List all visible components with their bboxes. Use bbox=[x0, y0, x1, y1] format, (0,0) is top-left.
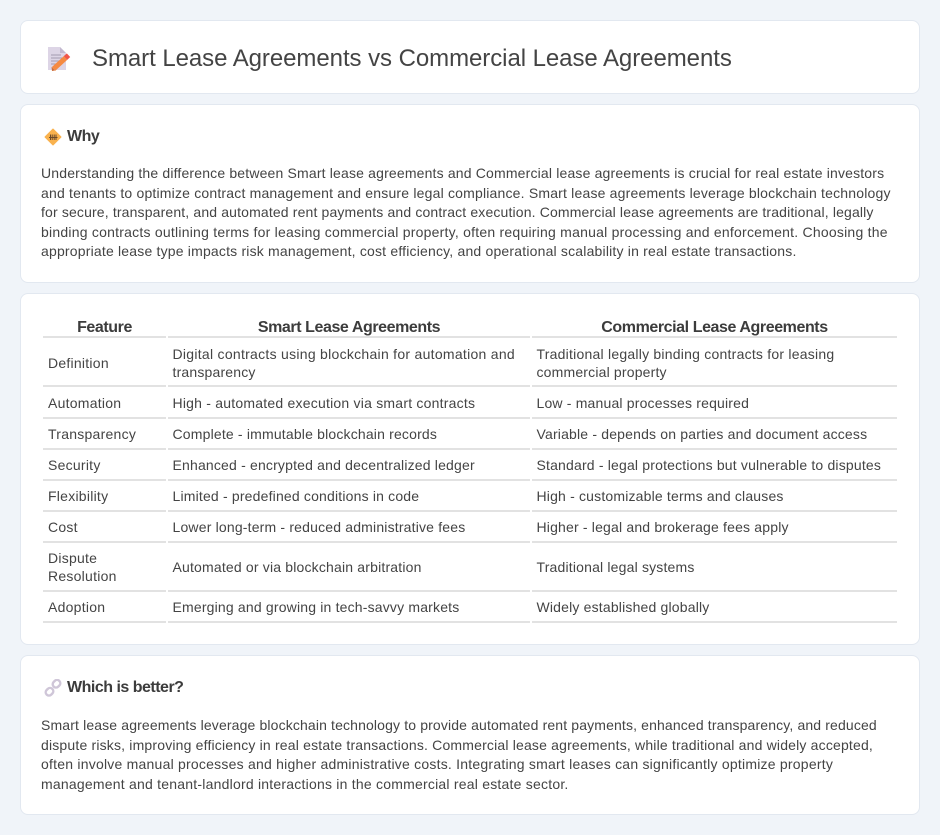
comparison table: Flexibility bbox=[48, 488, 108, 504]
heading: which is better: Which is better? bbox=[67, 679, 183, 696]
icon: chain link bbox=[44, 679, 62, 697]
text block: why explanation: Understanding the difference between Smart lease agreements and Commercial lease agreements is crucial for real estate investors bbox=[41, 165, 884, 181]
heading: why: Why bbox=[67, 128, 99, 145]
comparison table: Higher - legal and brokerage fees apply bbox=[536, 519, 789, 535]
comparison table: Complete - immutable blockchain records bbox=[172, 426, 437, 442]
comparison table: Digital contracts using blockchain for automation and bbox=[172, 346, 515, 362]
comparison table: Cost bbox=[48, 519, 78, 535]
comparison table: Traditional legally binding contracts for leasing bbox=[536, 346, 834, 362]
comparison table: commercial property bbox=[536, 364, 667, 380]
comparison table: Resolution bbox=[48, 568, 117, 584]
comparison table: Lower long-term - reduced administrative fees bbox=[172, 519, 465, 535]
text block: why explanation bbox=[41, 165, 891, 259]
comparison table: High - automated execution via smart contracts bbox=[172, 394, 475, 410]
comparison table: Limited - predefined conditions in code bbox=[172, 488, 419, 504]
text block: verdict bbox=[41, 717, 877, 792]
panel: which is better bbox=[20, 655, 920, 815]
comparison table: Definition bbox=[48, 354, 109, 370]
comparison table: Automated or via blockchain arbitration bbox=[172, 559, 422, 575]
comparison table: Low - manual processes required bbox=[536, 394, 749, 410]
comparison table: Dispute bbox=[48, 550, 97, 566]
text block: verdict: management and tenant-landlord interactions in the commercial real estate sector. bbox=[41, 776, 569, 792]
comparison table: Traditional legal systems bbox=[536, 559, 695, 575]
title: Smart Lease Agreements vs Commercial Lease Agreements bbox=[92, 45, 732, 72]
comparison table: Standard - legal protections but vulnerable to disputes bbox=[536, 457, 881, 473]
text block: why explanation: binding contracts outlining terms for leasing commercial property, often requiring manual processing and enforcement. Choosing the bbox=[41, 224, 888, 240]
text block: why explanation: appropriate lease type impacts risk management, cost efficiency, and operational scalability in real estate transactions. bbox=[41, 243, 797, 259]
icon: document with pencil bbox=[48, 47, 70, 71]
comparison table: Feature bbox=[77, 319, 132, 336]
comparison table: Widely established globally bbox=[536, 599, 709, 615]
comparison table: Security bbox=[48, 457, 101, 473]
comparison table: Emerging and growing in tech-savvy markets bbox=[172, 599, 459, 615]
comparison table: Automation bbox=[48, 394, 121, 410]
panel: why bbox=[20, 104, 920, 283]
panel: title card bbox=[20, 20, 920, 94]
comparison table: Transparency bbox=[48, 426, 136, 442]
comparison table: Adoption bbox=[48, 599, 105, 615]
comparison table: Commercial Lease Agreements bbox=[601, 319, 828, 336]
comparison table: Variable - depends on parties and document access bbox=[536, 426, 867, 442]
text block: verdict: dispute risks, improving efficiency in real estate transactions. Commercial lease agreements, while traditional and widely accepted, bbox=[41, 737, 873, 753]
panel: comparison table bbox=[20, 293, 920, 645]
comparison table: High - customizable terms and clauses bbox=[536, 488, 784, 504]
text block: why explanation: for secure, transparent, and automated rent payments and contract execution. Commercial lease agreements are traditional, legally bbox=[41, 204, 874, 220]
icon: orange warning diamond bbox=[44, 128, 62, 146]
comparison table: Smart Lease Agreements bbox=[258, 319, 440, 336]
text block: verdict: Smart lease agreements leverage blockchain technology to provide automated rent payments, enhanced transparency, and reduced bbox=[41, 717, 877, 733]
comparison table: transparency bbox=[172, 364, 256, 380]
text block: why explanation: and tenants to optimize contract management and ensure legal compliance. Smart lease agreements leverage blockchain technology bbox=[41, 185, 891, 201]
comparison table bbox=[43, 319, 897, 623]
comparison table: Enhanced - encrypted and decentralized ledger bbox=[172, 457, 475, 473]
text block: verdict: often involve manual processes and higher administrative costs. Integrating smart leases can significantly optimize property bbox=[41, 756, 833, 772]
